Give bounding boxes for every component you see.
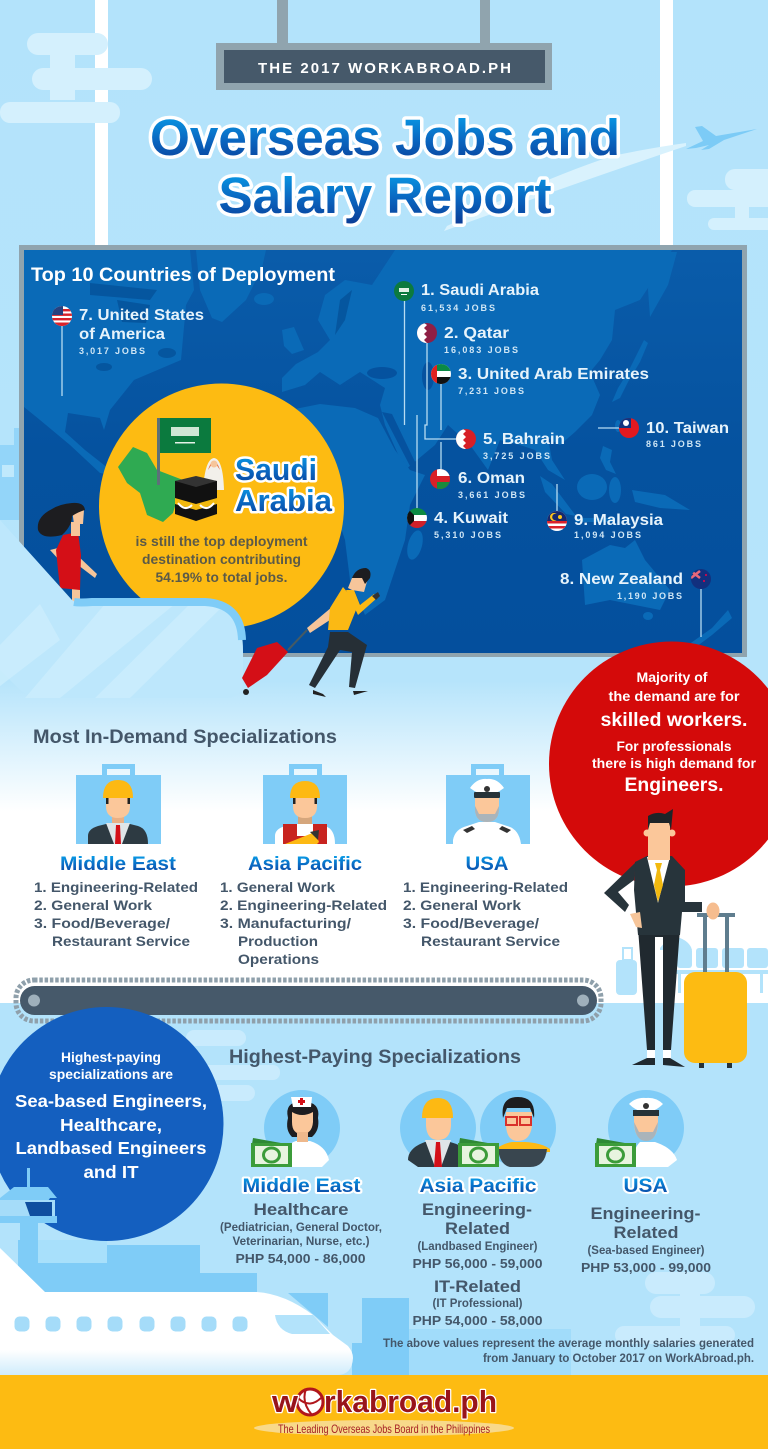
clouds top left [0,33,152,123]
country label: 4 Kuwait: 4. Kuwait [434,510,508,527]
baggage conveyor belt [16,980,601,1021]
heading: Saudi Arabia: Saudi [235,452,317,487]
salary column: USA: PHP 53,000 - 99,000 [581,1260,711,1275]
country label: 6 Oman: 3,661 JOBS [458,490,525,500]
flag: Taiwan [619,418,639,438]
country label: 8 New Zealand: 8. New Zealand [560,571,683,588]
figure: ship officer [453,779,521,844]
list: Middle East specializations: 2. General Work [34,897,152,913]
country label: 3 United Arab Emirates: 7,231 JOBS [458,386,524,396]
red callout: skilled workers: For professionals [616,739,732,754]
list: Middle East specializations [34,879,198,949]
clouds behind highest-paying heading [186,1030,280,1101]
briefcase: USA ship officer [446,766,530,844]
salary column: Middle East: (Pediatrician, General Doctor, [220,1222,382,1234]
country label: 9 Malaysia: 9. Malaysia [574,512,663,529]
salary column: Asia Pacific: IT-Related [434,1277,521,1296]
salary column: Middle East: Healthcare [254,1200,348,1219]
hanging sign: THE 2017 WORKABROAD.PH [258,60,511,77]
list: USA specializations: Restaurant Service [421,933,560,949]
workabroad.ph logo [254,1384,514,1436]
red callout: skilled workers: Engineers. [624,775,724,796]
icon: money [595,1138,636,1167]
salary column: Asia Pacific: (Landbased Engineer) [418,1241,538,1253]
flag: Malaysia [547,511,567,531]
salary column: Middle East: PHP 54,000 - 86,000 [236,1251,366,1266]
salary column: Asia Pacific [412,1176,542,1328]
blue callout: highest-paying specializations: Healthcare, [60,1115,162,1135]
airplane with contrail [444,126,757,231]
skyline left of map [0,428,20,520]
salary column: USA: Related [614,1223,678,1242]
figure: engineer in suit [88,780,148,844]
footer band [0,1375,768,1449]
footnote [383,1336,754,1365]
region title: Asia Pacific: Asia Pacific [248,854,362,875]
list: Asia Pacific specializations: 2. Engineering-Related [220,897,387,913]
portrait: engineer and IT professional with money [400,1090,556,1167]
list: Middle East specializations: Restaurant Service [52,933,190,949]
portrait: nurse with money [251,1090,340,1167]
suitcase [684,913,747,1068]
region title: Middle East: Middle East [60,854,177,875]
country label: 9 Malaysia [574,512,663,540]
red callout: skilled workers: skilled workers. [600,710,748,731]
flag: United Arab Emirates [431,364,451,384]
flag: Bahrain [456,429,476,449]
salary column: USA [581,1176,711,1275]
workabroad.ph logo: w [271,1384,299,1419]
country label: 4 Kuwait: 5,310 JOBS [434,530,501,540]
country label: 4 Kuwait [434,510,508,540]
heading: Saudi Arabia: Arabia [235,483,333,518]
country label: 10 Taiwan: 861 JOBS [646,439,701,449]
text: Saudi Arabia description: is still the top deployment [136,534,308,549]
map connector lines [62,300,701,637]
list: USA specializations [403,879,568,949]
airport skyline [18,1240,571,1375]
red callout: skilled workers: there is high demand for [592,756,757,771]
country label: 7 United States: 3,017 JOBS [79,346,145,356]
airport walkway shape [0,520,243,698]
salary column: USA: USA [624,1176,668,1197]
salary column: Asia Pacific: Asia Pacific [420,1176,537,1197]
lower section background [0,1003,768,1375]
footnote: from January to October 2017 on WorkAbroad.ph. [483,1351,754,1365]
woman illustration [38,503,97,602]
flag: United States [52,306,72,326]
control tower [0,1168,57,1282]
airplane body [0,1248,353,1375]
salary column: Middle East: Middle East [242,1176,361,1197]
country label: 5 Bahrain: 3,725 JOBS [483,451,550,461]
list: Middle East specializations: 3. Food/Beverage/ [34,915,170,931]
country label: 6 Oman [458,470,525,500]
list: Asia Pacific specializations [220,879,387,967]
country label: 5 Bahrain: 5. Bahrain [483,431,565,448]
country label: 1 Saudi Arabia: 1. Saudi Arabia [421,282,539,299]
portrait: ship officer with money [595,1090,684,1167]
list: Asia Pacific specializations: Production [238,933,318,949]
heading: highest-paying specializations: Highest-Paying Specializations [229,1046,521,1068]
country label: 10 Taiwan: 10. Taiwan [646,420,729,437]
title: Overseas Jobs and [150,109,620,166]
salary column: Middle East [220,1176,382,1266]
salary column: Asia Pacific: PHP 56,000 - 59,000 [412,1256,542,1271]
salary column: Asia Pacific: (IT Professional) [432,1298,523,1310]
flag: Oman [430,469,450,489]
country label: 8 New Zealand [560,571,683,601]
world map panel [19,245,747,657]
salary column: Asia Pacific: Engineering- [422,1200,532,1219]
country label: 3 United Arab Emirates: 3. United Arab Emirates [458,366,649,383]
text: Saudi Arabia description [136,534,308,585]
flag: Kuwait [407,508,427,528]
region title: USA: USA [466,854,509,875]
country label: 5 Bahrain [483,431,565,461]
callout: Saudi Arabia yellow circle [99,384,344,628]
country label: 7 United States: 7. United States [79,307,204,324]
list: USA specializations: 1. Engineering-Related [403,879,568,895]
icon: Arab man [203,458,224,490]
flag: Qatar [417,323,437,343]
salary column: Asia Pacific: PHP 54,000 - 58,000 [412,1313,542,1328]
country label: 10 Taiwan [646,420,729,449]
blue callout: highest-paying specializations: Sea-based Engineers, [15,1091,207,1111]
list: Asia Pacific specializations: 1. General Work [220,879,335,895]
red callout: skilled workers: Majority of [636,670,708,685]
icon: money [251,1138,292,1167]
icon: Saudi map [118,447,183,522]
red callout: skilled workers: the demand are for [608,689,740,704]
list: Asia Pacific specializations: 3. Manufacturing/ [220,915,351,931]
blue callout: highest-paying specializations: Highest-paying [61,1050,161,1065]
title: Salary Report [218,167,552,224]
traveller man with red suitcase [242,568,380,697]
red callout: skilled workers [549,642,768,886]
workabroad.ph logo: rkabroad.ph [324,1384,497,1419]
country label: 6 Oman: 6. Oman [458,470,525,487]
hanging sign [216,0,552,90]
figure: worker in safety vest [275,781,335,844]
icon: money [458,1138,499,1167]
footnote: The above values represent the average monthly salaries generated [383,1336,754,1350]
clouds lower right [615,1272,755,1344]
heading: Saudi Arabia [235,452,333,518]
country label: 1 Saudi Arabia: 61,534 JOBS [421,303,495,313]
salary column: USA: Engineering- [590,1204,700,1223]
businessman with yellow suitcase [604,809,747,1068]
briefcase: Middle East engineer [76,766,161,844]
country label: 2 Qatar: 16,083 JOBS [444,345,518,355]
blue callout: highest-paying specializations [0,1007,224,1241]
country label: 8 New Zealand: 1,190 JOBS [617,591,682,601]
country label: 7 United States [79,307,204,356]
text: Saudi Arabia description: 54.19% to total jobs. [156,570,288,585]
briefcase: Asia Pacific worker [263,766,347,844]
blue callout: highest-paying specializations: and IT [84,1162,139,1182]
workabroad.ph logo: The Leading Overseas Jobs Board in the Philippines [278,1422,490,1436]
country label: 9 Malaysia: 1,094 JOBS [574,530,641,540]
text: Saudi Arabia description: destination contributing [142,552,301,567]
country label: 2 Qatar [444,325,518,355]
blue callout: highest-paying specializations: Landbased Engineers [16,1138,207,1158]
salary column: USA: (Sea-based Engineer) [588,1245,705,1257]
list: USA specializations: 2. General Work [403,897,521,913]
list: USA specializations: 3. Food/Beverage/ [403,915,539,931]
list: Middle East specializations: 1. Engineering-Related [34,879,198,895]
flag: Saudi Arabia [394,281,414,301]
country label: 1 Saudi Arabia [421,282,539,313]
icon: Saudi flag [157,418,211,485]
clouds top right [687,169,768,230]
country label: 7 United States: of America [79,326,165,343]
country label: 3 United Arab Emirates [458,366,649,396]
heading: most in-demand specializations: Most In-Demand Specializations [33,726,337,748]
list: Asia Pacific specializations: Operations [238,951,319,967]
terminal window frame columns [95,0,673,246]
country label: 2 Qatar: 2. Qatar [444,325,509,342]
map heading: Top 10 Countries of Deployment [31,264,336,286]
icon: Kaaba [175,476,217,521]
blue callout: highest-paying specializations: specializations are [49,1067,174,1082]
faint luggage and seats behind businessman [616,937,768,995]
salary column: Middle East: Veterinarian, Nurse, etc.) [232,1236,370,1248]
title [150,109,620,224]
flag: New Zealand [691,569,711,589]
salary column: Asia Pacific: Related [445,1219,510,1238]
